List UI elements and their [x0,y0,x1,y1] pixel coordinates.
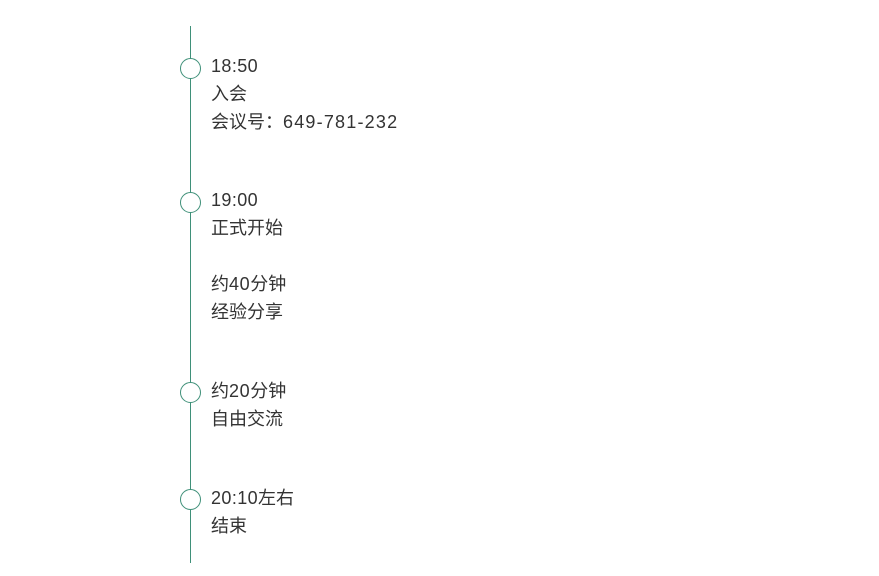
text block: 18:50 join meeting: 入会 [211,84,247,104]
text block: free discussion [211,381,286,429]
text block: 18:50 join meeting: 会议号：649-781-232 [211,112,398,132]
node marker: 19:00 [180,192,201,213]
node marker: 18:50 [180,58,201,79]
text block: end at about 20:10: 结束 [211,516,247,536]
text block: 19:00 official start and experience sharing: 经验分享 [211,302,283,322]
text block: free discussion: 约20分钟 [211,381,286,401]
text block: free discussion: 自由交流 [211,409,283,429]
text block: end at about 20:10 [211,488,294,536]
text block: 19:00 official start and experience sharing [211,190,286,322]
text block: 19:00 official start and experience sharing: 19:00 [211,190,258,210]
text block: end at about 20:10: 20:10左右 [211,488,294,508]
timeline vertical line [190,26,191,563]
node marker: end [180,489,201,510]
text block: 18:50 join meeting: 18:50 [211,56,258,76]
text block: 18:50 join meeting [211,56,398,132]
node marker: free discussion [180,382,201,403]
text block: 19:00 official start and experience sharing: 正式开始 [211,218,283,238]
text block: 19:00 official start and experience sharing: 约40分钟 [211,274,286,294]
